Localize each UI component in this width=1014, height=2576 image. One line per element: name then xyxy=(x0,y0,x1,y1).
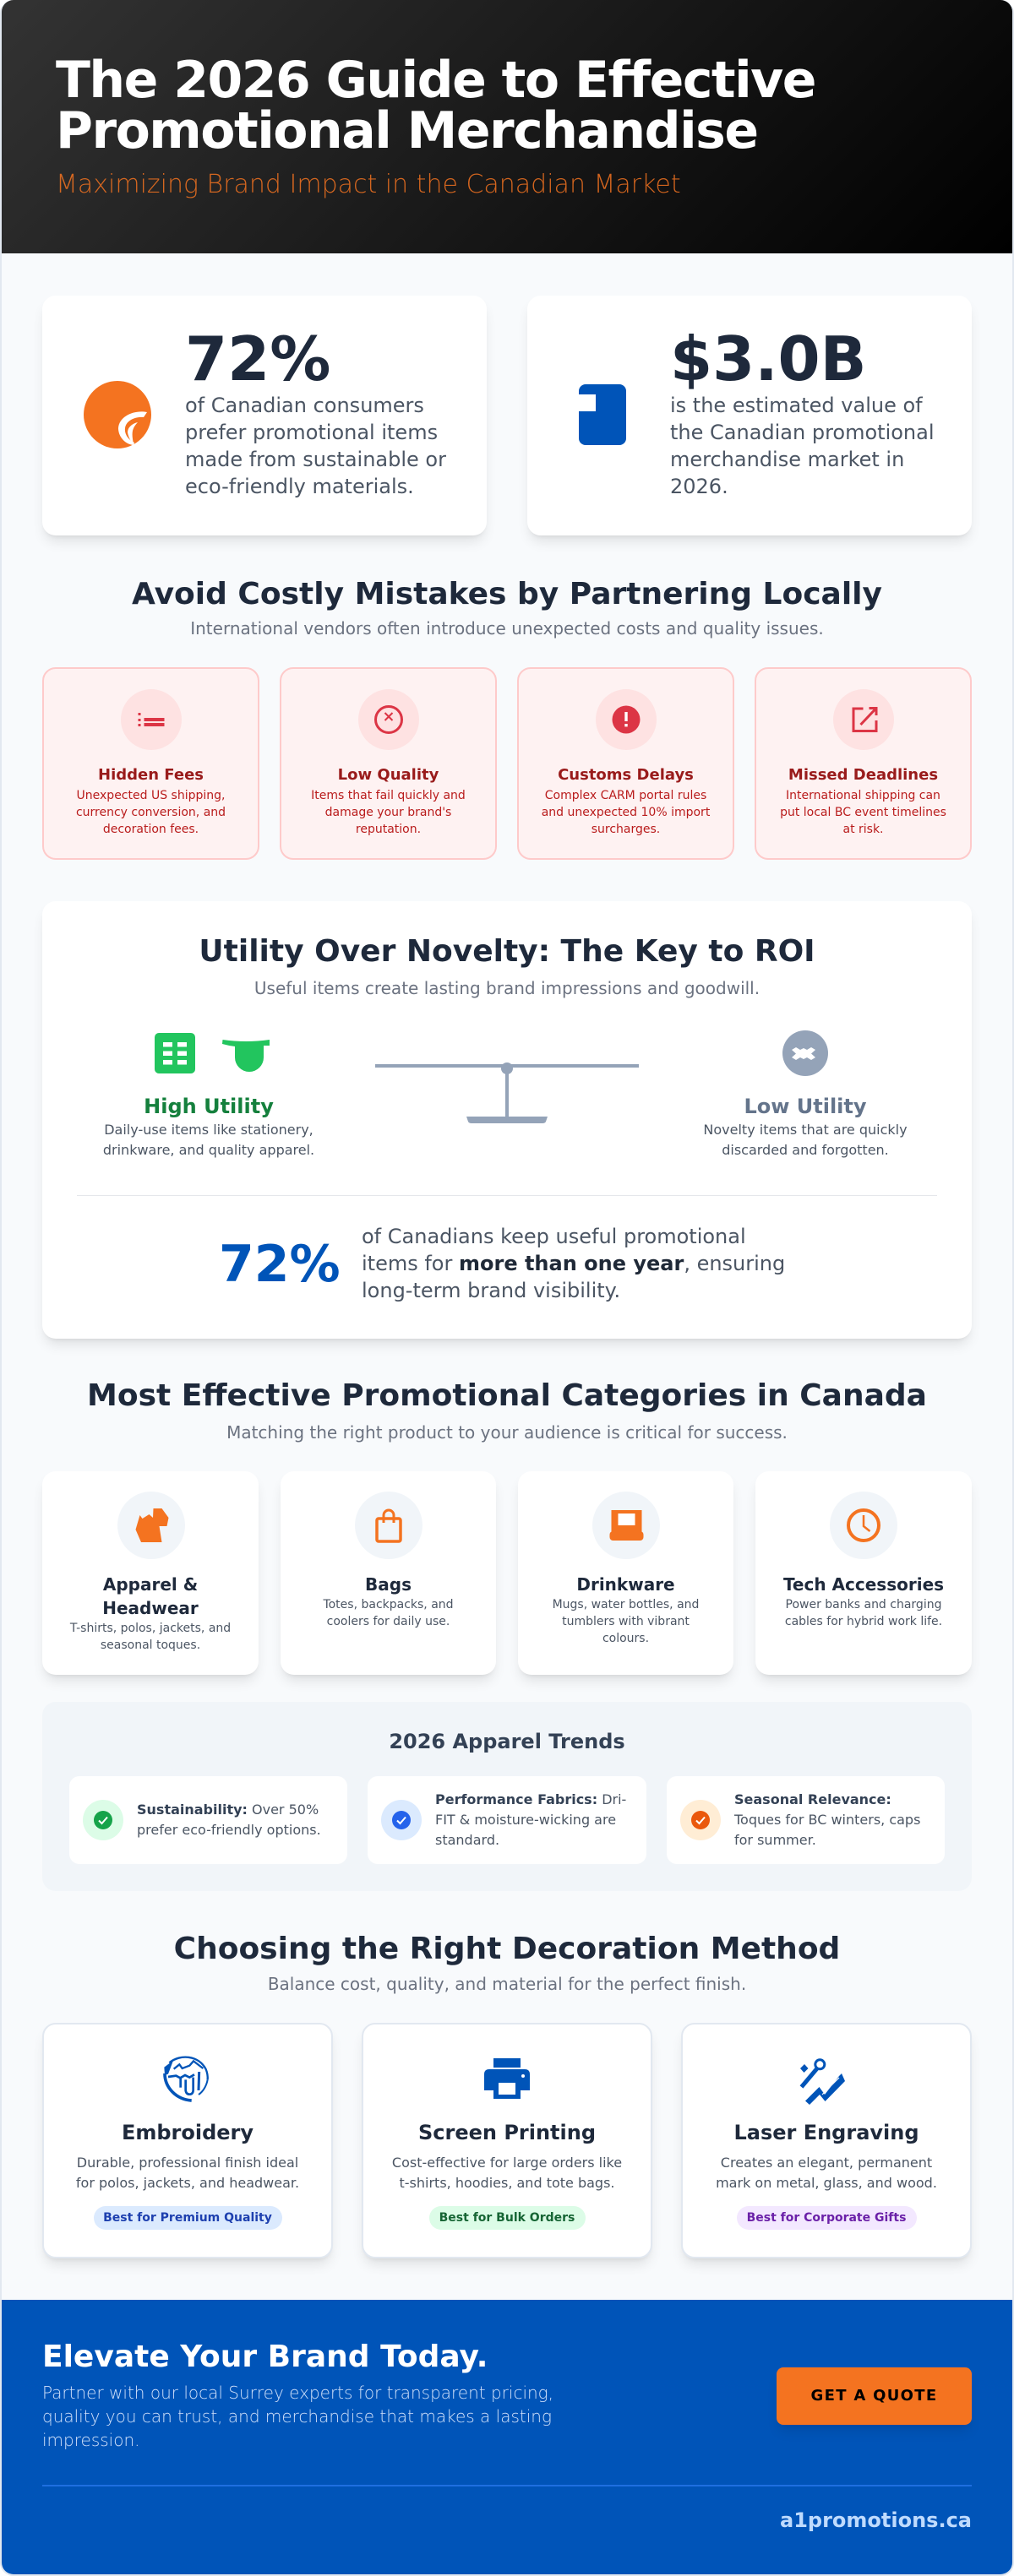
panel: apparel trends xyxy=(42,1702,972,1891)
stat text: the Canadian promotional xyxy=(670,421,935,444)
subheading: Useful items create lasting brand impressions and goodwill. xyxy=(254,978,760,998)
title: Apparel & xyxy=(103,1574,198,1595)
description: Items that fail quickly and xyxy=(311,789,466,802)
description: Complex CARM portal rules xyxy=(545,789,706,802)
description: low utility xyxy=(703,1122,908,1158)
panel: laser engraving xyxy=(681,2023,972,2258)
divider xyxy=(77,1195,937,1196)
panel: utility over novelty xyxy=(42,901,972,1339)
badge xyxy=(737,2206,916,2230)
description xyxy=(553,1598,699,1645)
badge xyxy=(93,2206,282,2230)
description xyxy=(76,789,226,836)
text xyxy=(435,1791,626,1848)
heading: decoration: Choosing the Right Decoration Method xyxy=(174,1932,840,1966)
subtitle: Maximizing Brand Impact in the Canadian Market xyxy=(56,170,681,199)
stat text: long-term brand visibility. xyxy=(362,1279,620,1302)
icon: laser xyxy=(799,2058,845,2105)
description: Mugs, water bottles, and xyxy=(553,1598,699,1611)
footer text xyxy=(42,2381,553,2452)
icon: printer xyxy=(484,2058,530,2099)
icon: cup xyxy=(592,1492,660,1559)
icon: list xyxy=(121,689,182,750)
text: Seasonal Relevance: xyxy=(734,1791,891,1807)
text: Toques for BC winters, caps xyxy=(734,1812,920,1828)
heading: avoid mistakes: Avoid Costly Mistakes by Partnering Locally xyxy=(132,577,882,611)
divider xyxy=(42,2485,972,2486)
trend: performance fabrics xyxy=(368,1776,646,1864)
panel: screen printing xyxy=(362,2023,652,2258)
description xyxy=(780,789,946,836)
description xyxy=(311,789,466,836)
website: a1promotions.ca xyxy=(780,2508,972,2532)
badge: Best for Bulk Orders xyxy=(439,2211,575,2225)
stat number: $3.0B xyxy=(670,323,867,394)
panel: tech accessories xyxy=(755,1471,972,1675)
icon: shirt xyxy=(117,1492,185,1559)
stat text: items for more than one year, ensuring xyxy=(362,1252,785,1275)
trend: seasonal relevance xyxy=(667,1776,945,1864)
footer text: Partner with our local Surrey experts for transparent pricing, xyxy=(42,2383,553,2403)
description: t-shirts, hoodies, and tote bags. xyxy=(399,2175,615,2191)
icon: low utility xyxy=(782,1030,828,1076)
description xyxy=(76,2155,299,2191)
panel: 72% stat xyxy=(42,296,487,535)
badge: Best for Premium Quality xyxy=(103,2211,272,2225)
panel: low quality xyxy=(280,667,497,860)
description: currency conversion, and xyxy=(76,806,226,819)
description: low utility: Novelty items that are quickly xyxy=(703,1122,908,1138)
heading: low utility: Low Utility xyxy=(744,1095,867,1118)
description: for polos, jackets, and headwear. xyxy=(76,2175,299,2191)
icon: bag xyxy=(355,1492,422,1559)
header banner xyxy=(2,0,1012,253)
icon: exclamation xyxy=(596,689,657,750)
icon: orange circle with swirl xyxy=(84,381,151,448)
description: and unexpected 10% import xyxy=(542,806,710,819)
description xyxy=(542,789,710,836)
title xyxy=(56,51,815,160)
stat number: 72% xyxy=(185,323,330,394)
text: standard. xyxy=(435,1832,499,1848)
description: seasonal toques. xyxy=(101,1639,200,1652)
title: Bags xyxy=(365,1574,412,1595)
title: Screen Printing xyxy=(418,2121,596,2144)
description: Totes, backpacks, and xyxy=(323,1598,454,1611)
panel: $3.0B stat xyxy=(527,296,972,535)
icon: blue box xyxy=(579,384,626,445)
title xyxy=(102,1574,199,1618)
text xyxy=(733,1791,920,1848)
icon: blue check xyxy=(381,1800,422,1840)
icon: green table xyxy=(155,1033,195,1073)
description: damage your brand's xyxy=(325,806,451,819)
stat text xyxy=(185,394,446,498)
panel: missed deadlines xyxy=(755,667,972,860)
description: Cost-effective for large orders like xyxy=(392,2155,622,2171)
panel: apparel xyxy=(42,1471,259,1675)
description xyxy=(785,1598,942,1628)
footer text: impression. xyxy=(42,2430,140,2450)
text xyxy=(137,1802,321,1838)
stat text: made from sustainable or xyxy=(185,448,446,471)
badge: Best for Corporate Gifts xyxy=(747,2211,906,2225)
title: Drinkware xyxy=(576,1574,675,1595)
title: Tech Accessories xyxy=(783,1574,944,1595)
panel: customs delays xyxy=(517,667,734,860)
stat text xyxy=(362,1225,785,1302)
description xyxy=(69,1622,231,1652)
text: Sustainability: Over 50% xyxy=(137,1802,319,1818)
panel: drinkware xyxy=(518,1471,733,1675)
subheading: decoration: Balance cost, quality, and material for the perfect finish. xyxy=(268,1974,746,1994)
icon: circle x xyxy=(358,689,419,750)
panel: hidden fees xyxy=(42,667,259,860)
description xyxy=(392,2155,622,2191)
stat text: is the estimated value of xyxy=(670,394,923,417)
description: coolers for daily use. xyxy=(327,1615,450,1628)
icon: external link xyxy=(833,689,894,750)
description: reputation. xyxy=(356,823,421,836)
stat text: prefer promotional items xyxy=(185,421,438,444)
panel: embroidery xyxy=(42,2023,333,2258)
stat text: eco-friendly materials. xyxy=(185,475,414,498)
text: prefer eco-friendly options. xyxy=(137,1822,321,1838)
description: low utility: discarded and forgotten. xyxy=(722,1142,889,1158)
heading: high utility: High Utility xyxy=(144,1095,274,1118)
scale illustration xyxy=(375,1062,639,1123)
description: Power banks and charging xyxy=(786,1598,941,1611)
text: Performance Fabrics: Dri- xyxy=(435,1791,626,1807)
description: Unexpected US shipping, xyxy=(77,789,225,802)
description: T-shirts, polos, jackets, and xyxy=(70,1622,231,1635)
stat text: of Canadians keep useful promotional xyxy=(362,1225,746,1248)
icon: globe xyxy=(163,2056,209,2102)
description: colours. xyxy=(602,1632,649,1645)
badge xyxy=(429,2206,585,2230)
footer text: quality you can trust, and merchandise that makes a lasting xyxy=(42,2406,552,2427)
stat text: 2026. xyxy=(670,475,728,498)
icon: green cup xyxy=(222,1040,270,1072)
description: surcharges. xyxy=(592,823,660,836)
title: Embroidery xyxy=(122,2121,254,2144)
button: GET A QUOTE xyxy=(811,2387,937,2405)
button xyxy=(777,2367,972,2425)
title: Headwear xyxy=(102,1598,199,1618)
text: for summer. xyxy=(734,1832,816,1848)
title: Low Quality xyxy=(338,766,439,784)
description: at risk. xyxy=(842,823,884,836)
description: International shipping can xyxy=(786,789,940,802)
description: tumblers with vibrant xyxy=(562,1615,690,1628)
stat text: merchandise market in xyxy=(670,448,904,471)
description: mark on metal, glass, and wood. xyxy=(716,2175,937,2191)
heading: Utility Over Novelty: The Key to ROI xyxy=(199,934,815,969)
title: Missed Deadlines xyxy=(788,766,938,784)
footer xyxy=(2,2300,1012,2574)
title: The 2026 Guide to Effective xyxy=(56,51,815,110)
icon: clock xyxy=(830,1492,897,1559)
description: Creates an elegant, permanent xyxy=(721,2155,932,2171)
subheading: categories: Matching the right product to your audience is critical for success. xyxy=(226,1422,788,1443)
stat: 72% keep: 72% xyxy=(219,1235,341,1294)
title: Customs Delays xyxy=(558,766,694,784)
description xyxy=(323,1598,454,1628)
trend: sustainability xyxy=(69,1776,347,1864)
footer heading: Elevate Your Brand Today. xyxy=(42,2340,488,2374)
description: high utility: drinkware, and quality apparel. xyxy=(103,1142,314,1158)
title: Hidden Fees xyxy=(98,766,204,784)
description xyxy=(683,2153,970,2193)
description: decoration fees. xyxy=(103,823,199,836)
stat text: of Canadian consumers xyxy=(185,394,424,417)
description: Durable, professional finish ideal xyxy=(77,2155,298,2171)
stat text xyxy=(670,394,935,498)
icon: green check xyxy=(83,1800,123,1840)
description: high utility: Daily-use items like stationery, xyxy=(104,1122,313,1138)
description: put local BC event timelines xyxy=(780,806,946,819)
title: Laser Engraving xyxy=(733,2121,919,2144)
description: high utility xyxy=(103,1122,314,1158)
heading: 2026 Apparel Trends xyxy=(389,1730,625,1753)
title: Promotional Merchandise xyxy=(56,101,758,160)
panel: bags xyxy=(281,1471,496,1675)
text: FIT & moisture-wicking are xyxy=(435,1812,616,1828)
subheading: avoid mistakes: International vendors often introduce unexpected costs and quality issues. xyxy=(190,618,824,639)
icon: orange check xyxy=(680,1800,721,1840)
heading: categories: Most Effective Promotional Categories in Canada xyxy=(87,1378,927,1413)
description: cables for hybrid work life. xyxy=(785,1615,942,1628)
